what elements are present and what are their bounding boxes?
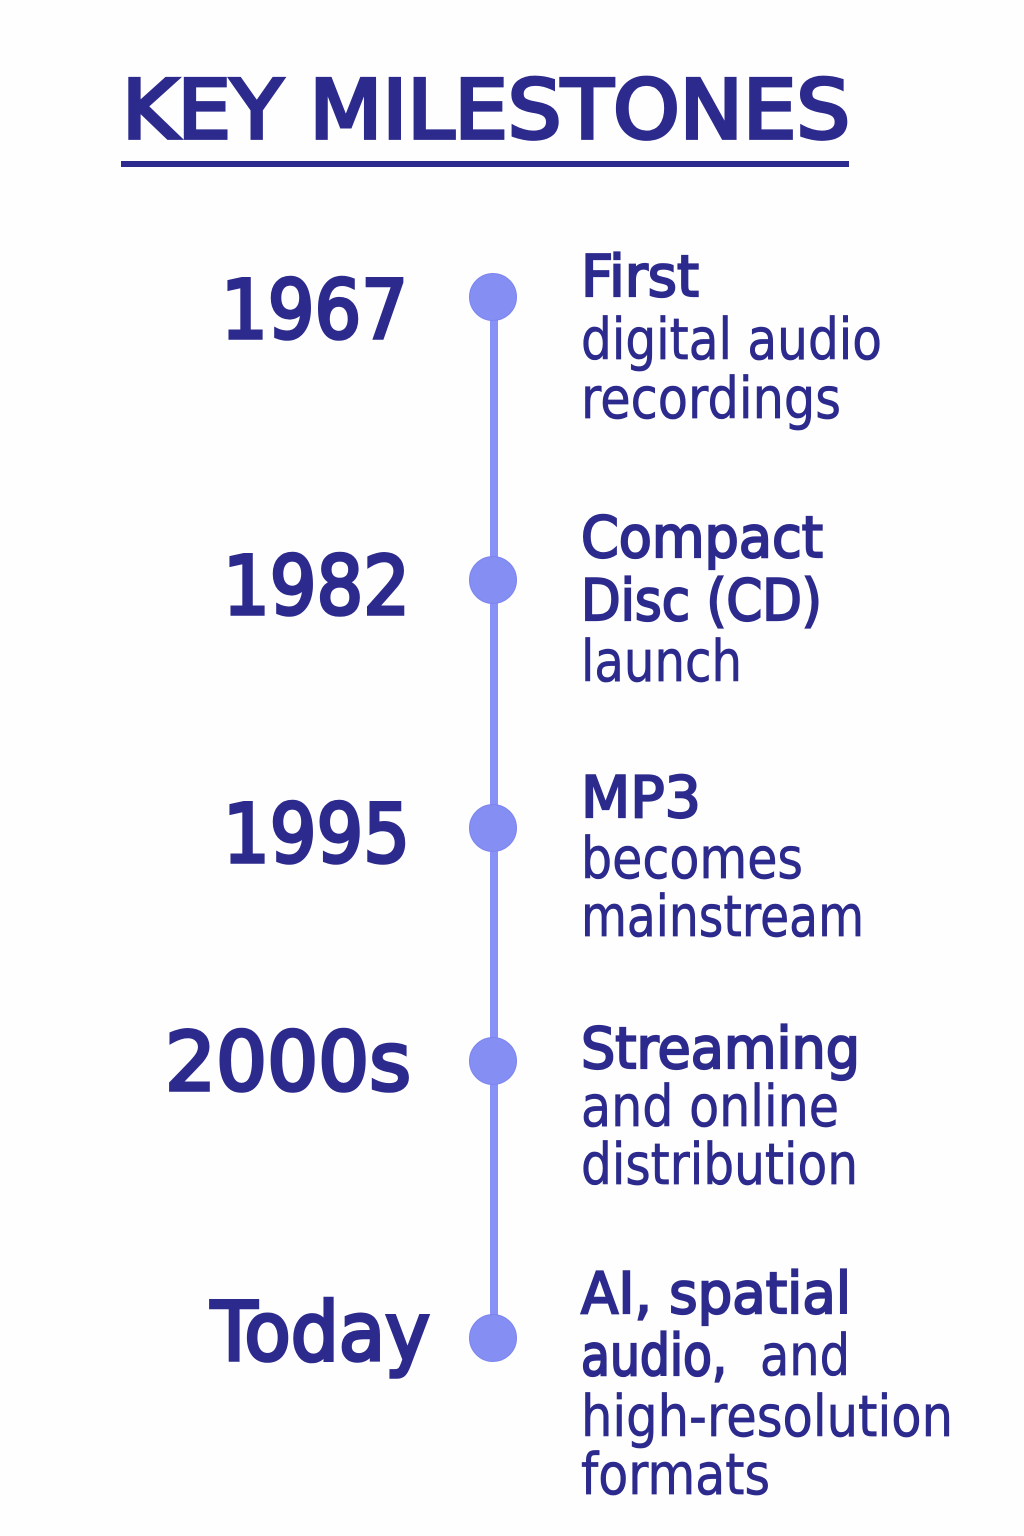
milestone: 1982: 1982 [223, 540, 410, 634]
milestone: 1967 [221, 244, 882, 432]
milestone: 2000s: Streaming [581, 1016, 860, 1082]
milestone: 1967: First [581, 244, 699, 310]
timeline line [490, 297, 498, 1338]
milestone: Today: and [760, 1323, 850, 1389]
title: KEY MILESTONES [122, 64, 850, 158]
milestone: 1995: 1995 [223, 788, 410, 882]
milestone: 1982 [223, 505, 823, 695]
milestone: 1982: Compact [581, 505, 823, 571]
milestone: 1995: MP3 [581, 765, 701, 831]
milestone: 1995: mainstream [581, 884, 864, 950]
milestone: 1995: becomes [581, 826, 803, 892]
milestone: 1967: recordings [581, 366, 841, 432]
milestone: Today: high-resolution [581, 1384, 953, 1450]
milestone: 1995 [223, 765, 864, 950]
milestone: Today: formats [581, 1442, 770, 1508]
milestone: Today: audio, [581, 1323, 727, 1389]
milestone: 1982: launch [581, 629, 742, 695]
milestone: 2000s: distribution [581, 1132, 858, 1198]
milestone: Today: Today [210, 1286, 430, 1380]
milestone: Today: AI, spatial [581, 1261, 851, 1327]
milestone: 1967: digital audio [581, 307, 882, 373]
milestone: 1967: 1967 [221, 264, 408, 358]
milestone: 2000s: 2000s [165, 1016, 411, 1110]
milestone: Today [210, 1261, 953, 1508]
milestone: 1982: Disc (CD) [581, 568, 822, 634]
milestone: 2000s: and online [581, 1074, 839, 1140]
milestone: 2000s [165, 1016, 860, 1198]
